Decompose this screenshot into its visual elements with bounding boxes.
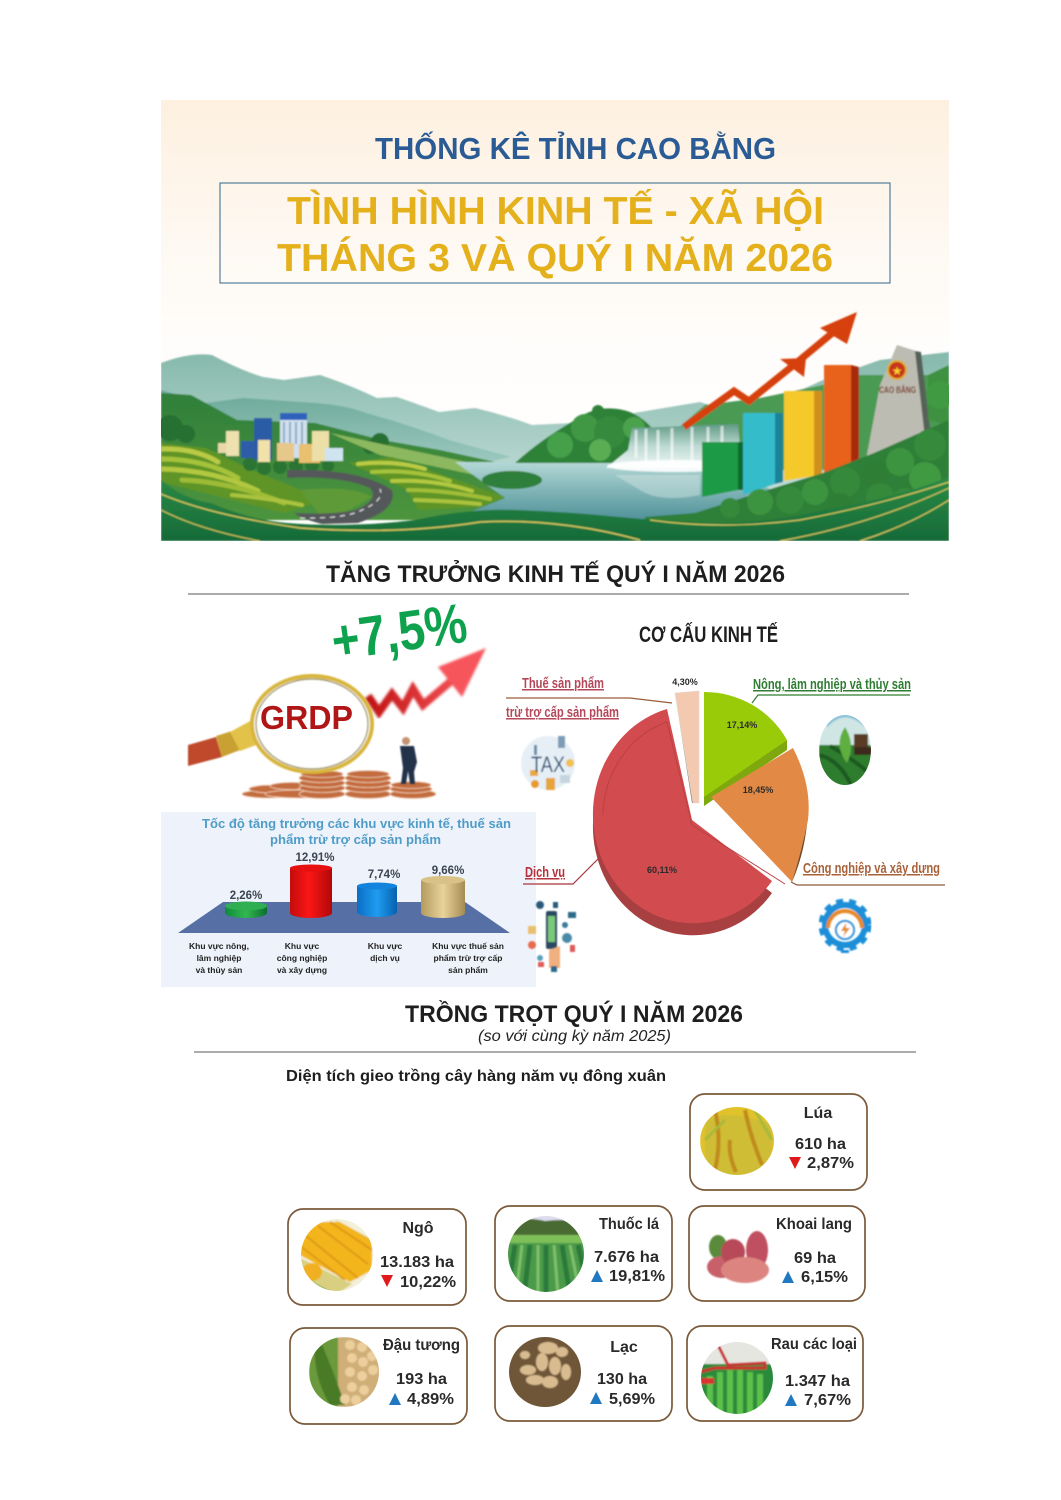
cylinder: services 7.74% [357, 869, 400, 917]
rice terraces right [349, 457, 505, 510]
card: sweet potato: Khoai lang [776, 1216, 852, 1233]
card: rice: 2,87% [807, 1155, 854, 1172]
border marker stone: CAO BẰNG [879, 385, 916, 395]
label: services [523, 859, 598, 884]
panel: economic structure pie [506, 622, 945, 972]
icon: tax: TAX [531, 752, 565, 777]
card: sweet potato: 6,15% [801, 1269, 848, 1286]
axis labels: Khu vực [285, 941, 320, 951]
panel: GRDP illustration [188, 591, 486, 798]
pie slice: industry 18.45%: 18,45% [743, 785, 773, 795]
icon: corn photo [301, 1219, 373, 1291]
card: rice [690, 1094, 867, 1190]
tree row [243, 457, 334, 475]
cylinder: industry 12.91%: 12,91% [295, 852, 335, 864]
pie heading: CƠ CẤU KINH TẾ [639, 622, 778, 647]
chart title: Tốc độ tăng trưởng các khu vực kinh tế, thuế sản [202, 816, 511, 831]
icon: up triangle [782, 1271, 794, 1283]
icon: industry gear [821, 901, 869, 953]
panel: sector growth chart [161, 812, 536, 987]
cylinder: industry 12.91% [290, 852, 335, 918]
card: peanut: 130 ha [597, 1371, 647, 1388]
axis labels: Khu vực nông, [189, 941, 249, 951]
chart title [202, 816, 511, 847]
axis labels: phẩm trừ trợ cấp [434, 953, 502, 963]
icon: down triangle [381, 1275, 393, 1287]
card: soybean: Đậu tương [383, 1337, 460, 1354]
main title line 2: THÁNG 3 VÀ QUÝ I NĂM 2026 [277, 236, 833, 280]
growth value: +7,5% [327, 591, 471, 672]
coin stacks [242, 770, 436, 798]
axis labels: và thủy sản [196, 965, 242, 975]
icon: up triangle [785, 1394, 797, 1406]
cylinder: product tax 9.66%: 9,66% [432, 865, 464, 877]
pie slice: product tax 4.30%: 4,30% [672, 677, 698, 687]
card: sweet potato [689, 1206, 865, 1301]
card: peanut: Lạc [610, 1339, 638, 1356]
card: vegetables [687, 1326, 863, 1421]
chart floor [178, 902, 510, 933]
card: corn [288, 1209, 466, 1305]
cylinder: product tax 9.66% [421, 865, 465, 918]
banner landscape illustration [157, 312, 954, 541]
label: product tax [506, 675, 672, 721]
cylinder: services 7.74%: 7,74% [368, 869, 400, 881]
card: tobacco: Thuốc lá [599, 1216, 659, 1233]
center forest [515, 405, 668, 463]
businessman figure [400, 737, 417, 784]
card: vegetables: 7,67% [804, 1392, 851, 1409]
rice terraces left [161, 443, 325, 513]
icon: peanut photo [509, 1337, 581, 1407]
cylinder: agriculture 2.26%: 2,26% [230, 890, 262, 902]
icon: tax [521, 736, 575, 790]
label: industry [791, 860, 945, 885]
text: sown area caption: Diện tích gieo trồng cây hàng năm vụ đông xuân [286, 1068, 666, 1085]
faded far terrace [331, 432, 472, 475]
border marker stone [866, 345, 930, 460]
bar chart icons [702, 365, 859, 497]
icon: rice photo [700, 1105, 775, 1177]
pie slice: services 60.11%: 60,11% [647, 865, 677, 875]
pie slice: agriculture 17.14% [704, 692, 787, 806]
icon: digital services [528, 901, 576, 972]
icon: up triangle [590, 1392, 602, 1404]
icon: up triangle [591, 1270, 603, 1282]
icon: farm [819, 715, 872, 787]
icon: vegetables photo [700, 1340, 775, 1416]
card: vegetables: Rau các loại [771, 1336, 857, 1353]
axis labels: dịch vụ [370, 953, 400, 963]
squiggle arrow [368, 648, 486, 712]
card: tobacco: 7.676 ha [594, 1249, 659, 1266]
right forest hill [645, 420, 949, 530]
label: agriculture [752, 676, 911, 703]
icon: soybean photo [309, 1337, 380, 1407]
chart title: phẩm trừ trợ cấp sản phẩm [270, 832, 441, 847]
heading: economic growth: TĂNG TRƯỞNG KINH TẾ QUÝ I NĂM 2026 [326, 559, 785, 588]
card: soybean: 4,89% [407, 1391, 454, 1408]
pie slice: industry 18.45% [711, 748, 809, 882]
heading: crop cultivation: TRỒNG TRỌT QUÝ I NĂM 2026 [405, 1000, 743, 1028]
axis labels: sản phẩm [448, 965, 488, 975]
border marker stone: ★ [892, 364, 902, 378]
icon: tobacco field photo [508, 1216, 584, 1292]
axis labels: công nghiệp [277, 953, 327, 963]
card: soybean: 193 ha [396, 1371, 447, 1388]
city buildings [218, 413, 343, 463]
icon: down triangle [789, 1157, 801, 1169]
card: sweet potato: 69 ha [794, 1250, 836, 1267]
subheading: comparison note: (so với cùng kỳ năm 2025) [478, 1028, 671, 1045]
infographic canvas [161, 100, 949, 1425]
left tree cluster [157, 415, 389, 454]
card: rice: 610 ha [795, 1136, 846, 1153]
waterfall [606, 424, 743, 498]
bottom green band [161, 477, 949, 541]
GRDP label: GRDP [260, 699, 353, 736]
pie slice: agriculture 17.14%: 17,14% [727, 720, 757, 730]
icon: sweet potato photo [707, 1231, 769, 1283]
axis labels: và xây dựng [277, 965, 327, 975]
icon: up triangle [389, 1393, 401, 1405]
card: corn: 10,22% [400, 1274, 456, 1291]
panel: banner [157, 100, 954, 541]
label: product tax: trừ trợ cấp sản phẩm [506, 704, 619, 721]
growth arrow [684, 312, 857, 427]
label: product tax: Thuế sản phẩm [522, 675, 604, 692]
label: industry: Công nghiệp và xây dựng [803, 860, 940, 877]
axis labels: lâm nghiệp [197, 953, 241, 963]
axis labels: Khu vực [368, 941, 403, 951]
card: tobacco [495, 1206, 672, 1301]
pie slice: services 60.11% [593, 709, 785, 935]
card: corn: 13.183 ha [380, 1254, 454, 1271]
axis labels: Khu vực thuế sản [432, 941, 504, 951]
main title line 1: TÌNH HÌNH KINH TẾ - XÃ HỘI [287, 188, 824, 233]
label: agriculture: Nông, lâm nghiệp và thủy sản [753, 676, 911, 693]
cylinder: agriculture 2.26% [225, 890, 267, 918]
banner title: THỐNG KÊ TỈNH CAO BẰNG [375, 130, 776, 166]
card: vegetables: 1.347 ha [785, 1373, 850, 1390]
card: rice: Lúa [804, 1105, 832, 1122]
card: tobacco: 19,81% [609, 1268, 665, 1285]
axis labels [189, 941, 504, 975]
pie slice: product tax 4.30% [672, 677, 699, 803]
card: soybean [290, 1328, 467, 1424]
title box [220, 183, 890, 283]
card: corn: Ngô [402, 1220, 434, 1237]
card: peanut: 5,69% [609, 1391, 655, 1408]
banner sky background [161, 100, 949, 541]
magnifying glass [188, 676, 372, 772]
card: peanut [495, 1326, 672, 1421]
road [287, 470, 393, 524]
right back forest [926, 364, 949, 424]
label: services: Dịch vụ [525, 864, 565, 881]
